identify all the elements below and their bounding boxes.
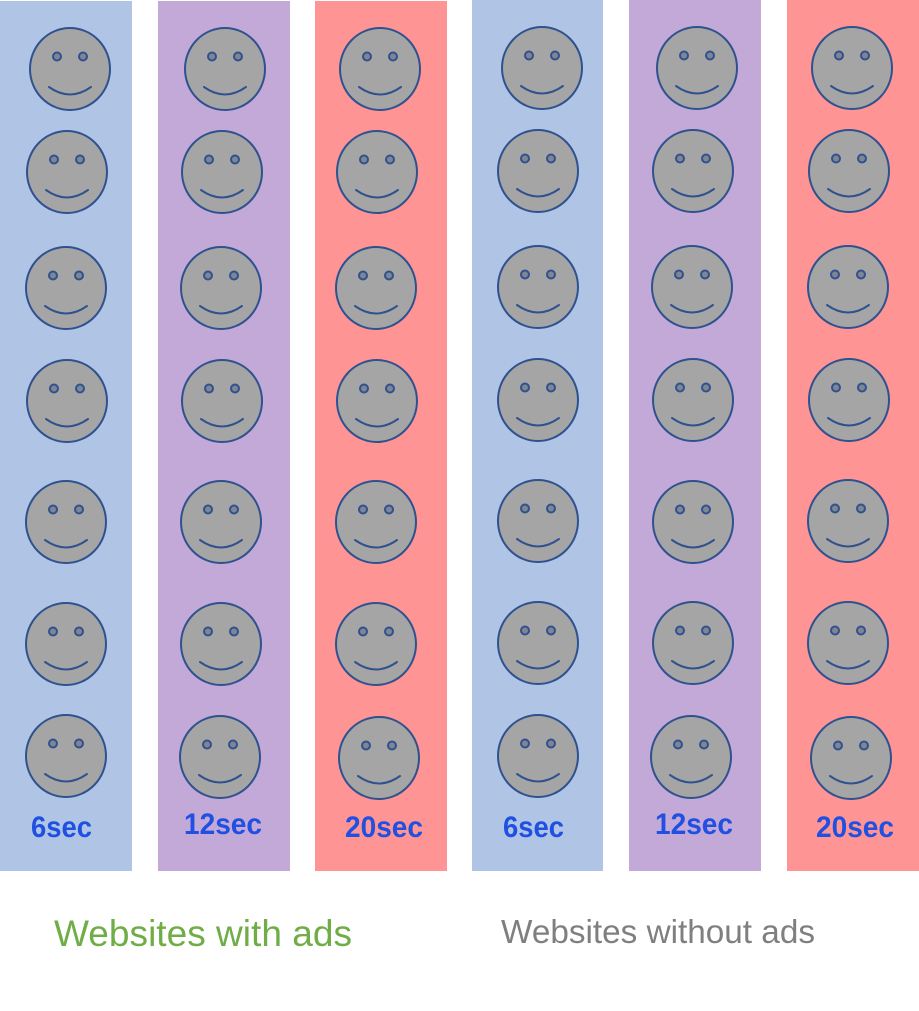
column background bbox=[0, 1, 132, 871]
icon: smiley face bbox=[808, 602, 888, 684]
label: 20sec: 20sec bbox=[345, 811, 423, 844]
panel: websites without ads, 12sec bbox=[629, 0, 761, 871]
heading: websites with ads: Websites with ads bbox=[54, 913, 352, 954]
label: 20sec: 20sec bbox=[816, 811, 894, 844]
column background bbox=[629, 0, 761, 871]
label: 6sec: 6sec bbox=[503, 811, 564, 844]
panel: websites without ads, 20sec bbox=[787, 0, 919, 871]
icon: smiley face bbox=[26, 481, 106, 563]
icon: smiley face bbox=[498, 359, 578, 441]
icon: smiley face bbox=[653, 481, 733, 563]
icon: smiley face bbox=[498, 602, 578, 684]
icon: smiley face bbox=[340, 28, 420, 110]
icon: smiley face bbox=[653, 359, 733, 441]
column background bbox=[315, 1, 447, 871]
icon: smiley face bbox=[809, 130, 889, 212]
icon: smiley face bbox=[182, 360, 262, 442]
column background bbox=[472, 0, 603, 871]
icon: smiley face bbox=[27, 360, 107, 442]
icon: smiley face bbox=[181, 603, 261, 685]
icon: smiley face bbox=[498, 130, 578, 212]
icon: smiley face bbox=[808, 246, 888, 328]
icon: smiley face bbox=[652, 246, 732, 328]
panel: websites with ads, 6sec bbox=[0, 1, 132, 871]
icon: smiley face bbox=[653, 602, 733, 684]
icon: smiley face bbox=[181, 247, 261, 329]
icon: smiley face bbox=[26, 715, 106, 797]
column background bbox=[158, 1, 290, 871]
icon: smiley face bbox=[812, 27, 892, 109]
icon: smiley face bbox=[498, 715, 578, 797]
panel: websites without ads, 6sec bbox=[472, 0, 603, 871]
panel: websites with ads, 20sec bbox=[315, 1, 447, 871]
icon: smiley face bbox=[336, 481, 416, 563]
icon: smiley face bbox=[808, 480, 888, 562]
label: 6sec: 6sec bbox=[31, 811, 92, 844]
icon: smiley face bbox=[181, 481, 261, 563]
icon: smiley face bbox=[27, 131, 107, 213]
icon: smiley face bbox=[180, 716, 260, 798]
icon: smiley face bbox=[502, 27, 582, 109]
icon: smiley face bbox=[26, 603, 106, 685]
icon: smiley face bbox=[498, 246, 578, 328]
icon: smiley face bbox=[182, 131, 262, 213]
icon: smiley face bbox=[653, 130, 733, 212]
icon: smiley face bbox=[657, 27, 737, 109]
panel: websites with ads, 12sec bbox=[158, 1, 290, 871]
column background bbox=[787, 0, 919, 871]
label: 12sec: 12sec bbox=[655, 808, 733, 841]
icon: smiley face bbox=[185, 28, 265, 110]
icon: smiley face bbox=[26, 247, 106, 329]
icon: smiley face bbox=[651, 716, 731, 798]
label: 12sec: 12sec bbox=[184, 808, 262, 841]
icon: smiley face bbox=[339, 717, 419, 799]
icon: smiley face bbox=[811, 717, 891, 799]
icon: smiley face bbox=[337, 131, 417, 213]
icon: smiley face bbox=[337, 360, 417, 442]
icon: smiley face bbox=[336, 603, 416, 685]
icon: smiley face bbox=[498, 480, 578, 562]
icon: smiley face bbox=[336, 247, 416, 329]
heading: websites without ads: Websites without ads bbox=[501, 913, 815, 950]
icon: smiley face bbox=[30, 28, 110, 110]
icon: smiley face bbox=[809, 359, 889, 441]
